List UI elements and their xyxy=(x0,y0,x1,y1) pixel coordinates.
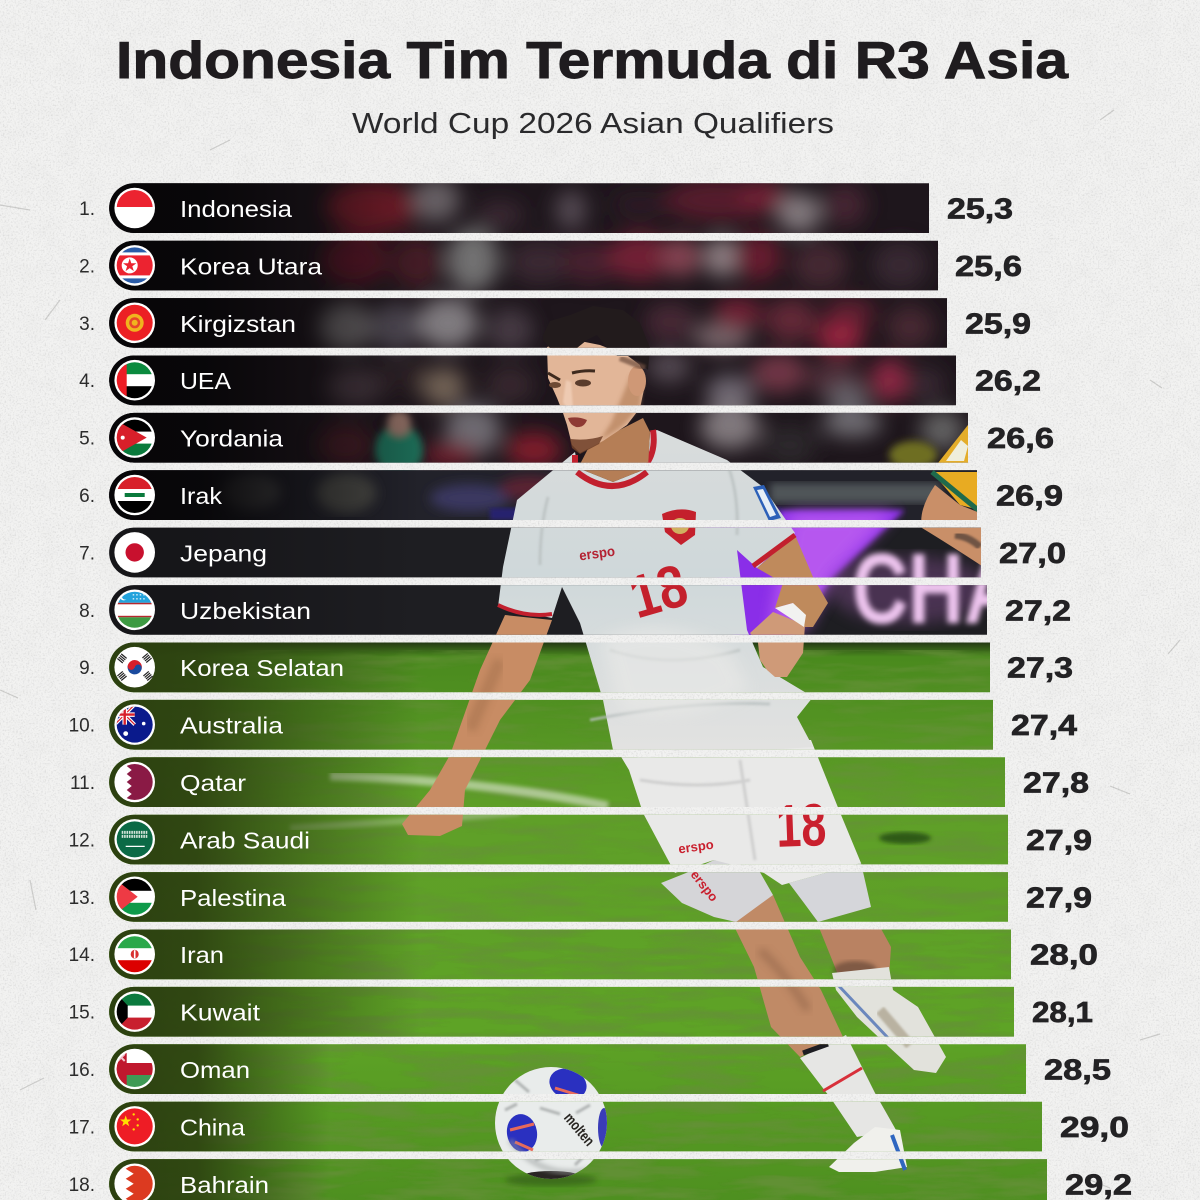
row 9: Korea Selatan xyxy=(79,647,1073,688)
sleeve badge xyxy=(753,485,781,521)
country name: Korea Utara xyxy=(180,253,322,279)
country name: Qatar xyxy=(180,770,246,796)
value: 25,6 xyxy=(955,251,1022,283)
country name: Arab Saudi xyxy=(180,827,310,853)
flag: Indonesia xyxy=(114,188,155,228)
rank: 15. xyxy=(69,1003,95,1024)
rank: 12. xyxy=(69,830,95,851)
stadium crowd xyxy=(109,183,981,530)
flag: Uzbekistan xyxy=(114,590,155,630)
flag: China xyxy=(114,1106,155,1147)
row 6: Irak xyxy=(79,475,1063,515)
row 13: Palestina xyxy=(69,876,1092,917)
row 3: Kirgizstan xyxy=(79,302,1031,343)
rank: 2. xyxy=(79,256,95,277)
value: 27,2 xyxy=(1005,595,1071,627)
row 1: Indonesia xyxy=(79,188,1013,228)
value: 27,4 xyxy=(1011,710,1077,742)
main player: erspo xyxy=(688,867,721,904)
row 4: UEA xyxy=(79,360,1041,401)
row 17: China xyxy=(69,1106,1129,1147)
collar and trims xyxy=(575,430,654,486)
main player: erspo xyxy=(677,837,715,856)
value: 27,8 xyxy=(1023,768,1089,800)
value: 26,9 xyxy=(996,480,1063,512)
row 11: Qatar xyxy=(70,762,1089,802)
country name: Australia xyxy=(180,713,283,739)
country name: Bahrain xyxy=(180,1172,269,1198)
value: 25,3 xyxy=(947,194,1013,226)
rank: 14. xyxy=(69,945,95,966)
rank: 18. xyxy=(69,1175,95,1196)
hair xyxy=(548,340,650,370)
flag: Bahrain xyxy=(114,1164,155,1200)
rank: 6. xyxy=(79,486,95,507)
rank: 5. xyxy=(79,429,95,450)
flag: Yordania xyxy=(114,417,155,458)
flag: Australia xyxy=(114,704,155,745)
rank: 11. xyxy=(70,773,95,794)
opposing player arm at the right edge xyxy=(921,425,985,568)
flag: Qatar xyxy=(114,762,155,802)
rank: 4. xyxy=(79,371,95,392)
rank: 16. xyxy=(69,1060,95,1081)
value: 27,9 xyxy=(1026,882,1092,914)
row 15: Kuwait xyxy=(69,991,1093,1032)
country name: Palestina xyxy=(180,885,286,911)
main player: 18 xyxy=(775,791,827,860)
rank: 13. xyxy=(69,888,95,909)
row 2: Korea Utara xyxy=(79,245,1022,286)
value: 27,9 xyxy=(1026,825,1092,857)
row 8: Uzbekistan xyxy=(79,590,1071,630)
row 18: Bahrain xyxy=(69,1164,1132,1200)
rank: 1. xyxy=(79,199,95,220)
value: 28,1 xyxy=(1032,997,1093,1029)
value: 28,0 xyxy=(1030,940,1098,972)
country name: Iran xyxy=(180,942,224,968)
row 10: Australia xyxy=(69,704,1077,745)
left colour fade behind country names xyxy=(109,183,406,1200)
shorts xyxy=(661,860,773,922)
flag: UEA xyxy=(114,360,155,400)
country name: Yordania xyxy=(180,426,283,452)
value: 27,3 xyxy=(1007,653,1073,685)
row 7: Jepang xyxy=(79,532,1066,573)
jersey wording: erspo xyxy=(578,543,616,563)
rank: 10. xyxy=(69,716,95,737)
football: molten xyxy=(560,1110,598,1150)
row 16: Oman xyxy=(69,1049,1111,1089)
value: 29,0 xyxy=(1060,1112,1129,1144)
country name: Irak xyxy=(180,483,223,509)
flag: Korea Utara xyxy=(114,245,155,286)
flag: Irak xyxy=(114,475,155,515)
country name: Uzbekistan xyxy=(180,598,311,624)
row 14: Iran xyxy=(69,934,1098,974)
flag: Arab Saudi xyxy=(114,819,155,860)
subtitle: World Cup 2026 Asian Qualifiers xyxy=(352,108,834,140)
flag: Korea Selatan xyxy=(114,647,155,688)
country name: Indonesia xyxy=(180,196,292,222)
jersey xyxy=(498,430,813,758)
rank: 3. xyxy=(79,314,95,335)
value: 26,2 xyxy=(975,366,1041,398)
flag: Iran xyxy=(114,934,155,974)
crest xyxy=(662,509,696,545)
lower stand, advertising board and purple light xyxy=(109,470,987,647)
neck and head xyxy=(578,418,650,482)
rank: 7. xyxy=(79,543,95,564)
country name: Oman xyxy=(180,1057,250,1083)
rank: 8. xyxy=(79,601,95,622)
pitch xyxy=(100,640,1060,1200)
left arm xyxy=(402,615,552,836)
value: 28,5 xyxy=(1044,1054,1111,1086)
country name: Kuwait xyxy=(180,1000,261,1026)
football xyxy=(495,1067,607,1179)
value: 25,9 xyxy=(965,308,1031,340)
country name: China xyxy=(180,1114,245,1140)
lower stand, advertising board and purple light: CHA xyxy=(852,533,1020,645)
rank: 9. xyxy=(79,658,95,679)
value: 27,0 xyxy=(999,538,1066,570)
row 12: Arab Saudi xyxy=(69,819,1092,860)
flag: Palestina xyxy=(114,876,155,917)
legs xyxy=(820,930,891,972)
flag: Oman xyxy=(114,1049,155,1089)
flag: Kirgizstan xyxy=(114,302,155,343)
photo bars: stadium, pitch and player seen through the ranking bars xyxy=(100,170,1060,1200)
country name: Kirgizstan xyxy=(180,311,296,337)
main player xyxy=(402,306,946,1185)
country name: UEA xyxy=(180,368,232,394)
country name: Korea Selatan xyxy=(180,655,344,681)
country name: Jepang xyxy=(180,540,267,566)
flag: Kuwait xyxy=(114,991,155,1032)
flag: Jepang xyxy=(114,532,155,573)
right arm and hand xyxy=(757,535,828,627)
rank: 17. xyxy=(69,1117,95,1138)
title: Indonesia Tim Termuda di R3 Asia xyxy=(116,32,1069,90)
row 5: Yordania xyxy=(79,417,1054,458)
value: 26,6 xyxy=(987,423,1054,455)
main player: 18 xyxy=(622,551,695,631)
